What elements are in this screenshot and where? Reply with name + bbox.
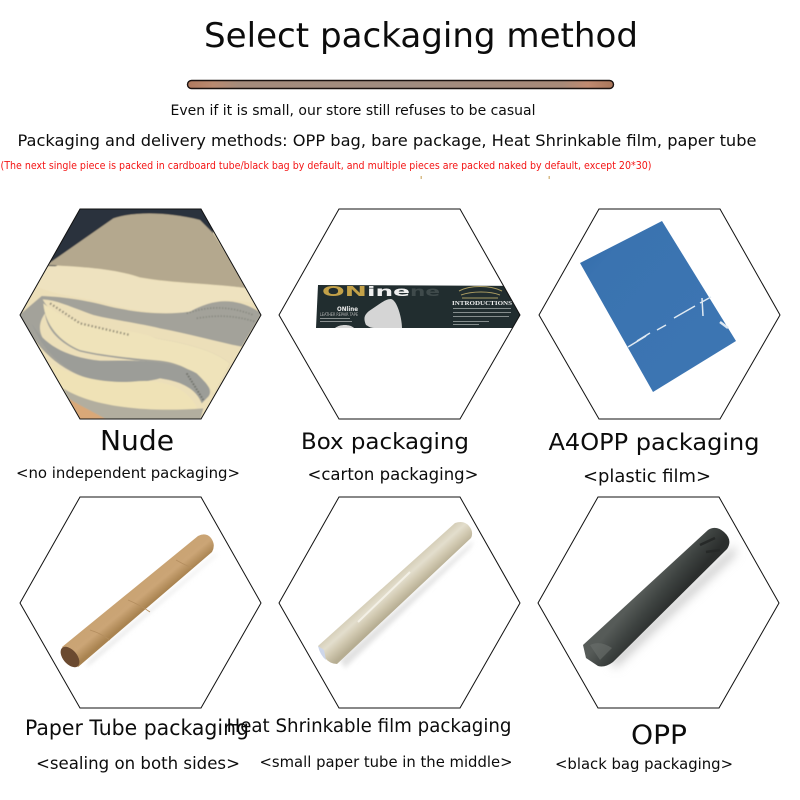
- panel: box packaging: [279, 209, 530, 484]
- panel: nude: [13, 207, 267, 482]
- title: Select packaging method: [204, 16, 638, 56]
- photo: black carton box: ONline: [337, 306, 358, 313]
- sublabel: <small paper tube in the middle>: [260, 753, 512, 771]
- label: Heat Shrinkable film packaging: [226, 715, 512, 737]
- packaging methods line: Packaging and delivery methods: OPP bag, bare package, Heat Shrinkable film, paper tube: [18, 131, 756, 150]
- label: Box packaging: [301, 430, 469, 455]
- label: Nude: [100, 424, 174, 457]
- red note: (The next single piece is packed in cardboard tube/black bag by default, and multiple pieces are packed naked by default, except 20*30): [0, 159, 652, 172]
- sublabel: <carton packaging>: [308, 465, 478, 484]
- panel: A4 OPP: [539, 209, 780, 487]
- decorative copper rod divider: [188, 80, 614, 88]
- tagline: Even if it is small, our store still refuses to be casual: [170, 103, 536, 119]
- photo: cardboard tube: [57, 534, 218, 671]
- label: OPP: [631, 720, 687, 751]
- photo: black carton box: [316, 285, 530, 328]
- photo: black bag roll: [583, 528, 735, 668]
- hexagon outline: [20, 209, 261, 419]
- panel: OPP: [538, 497, 779, 773]
- panel: paper tube: [20, 497, 261, 774]
- photo: black carton box: ine: [367, 285, 410, 300]
- sublabel: <plastic film>: [583, 466, 711, 487]
- panel: heat shrinkable film: [226, 497, 520, 771]
- small decorative marks: [420, 176, 550, 179]
- photo: black carton box: INTRODUCTIONS: [452, 300, 512, 307]
- photo: stacked nude sheets: [13, 207, 267, 423]
- sublabel: <no independent packaging>: [16, 464, 240, 482]
- hexagon outline: [20, 497, 261, 708]
- hexagon outline: [279, 497, 520, 708]
- photo: black carton box: ON: [322, 285, 367, 300]
- hexagon outline: [539, 209, 780, 419]
- sublabel: <black bag packaging>: [555, 755, 733, 773]
- photo: blue plastic film: [580, 221, 736, 392]
- photo: black carton box: LEATHER REPAIR TAPE: [320, 312, 358, 317]
- photo: black carton box: ne: [410, 285, 440, 300]
- hexagon outline: [279, 209, 520, 419]
- photo: film wrapped roll: [318, 522, 474, 668]
- label: Paper Tube packaging: [25, 716, 249, 740]
- hexagon outline: [538, 497, 779, 708]
- sublabel: <sealing on both sides>: [36, 754, 240, 774]
- label: A4OPP packaging: [548, 430, 760, 456]
